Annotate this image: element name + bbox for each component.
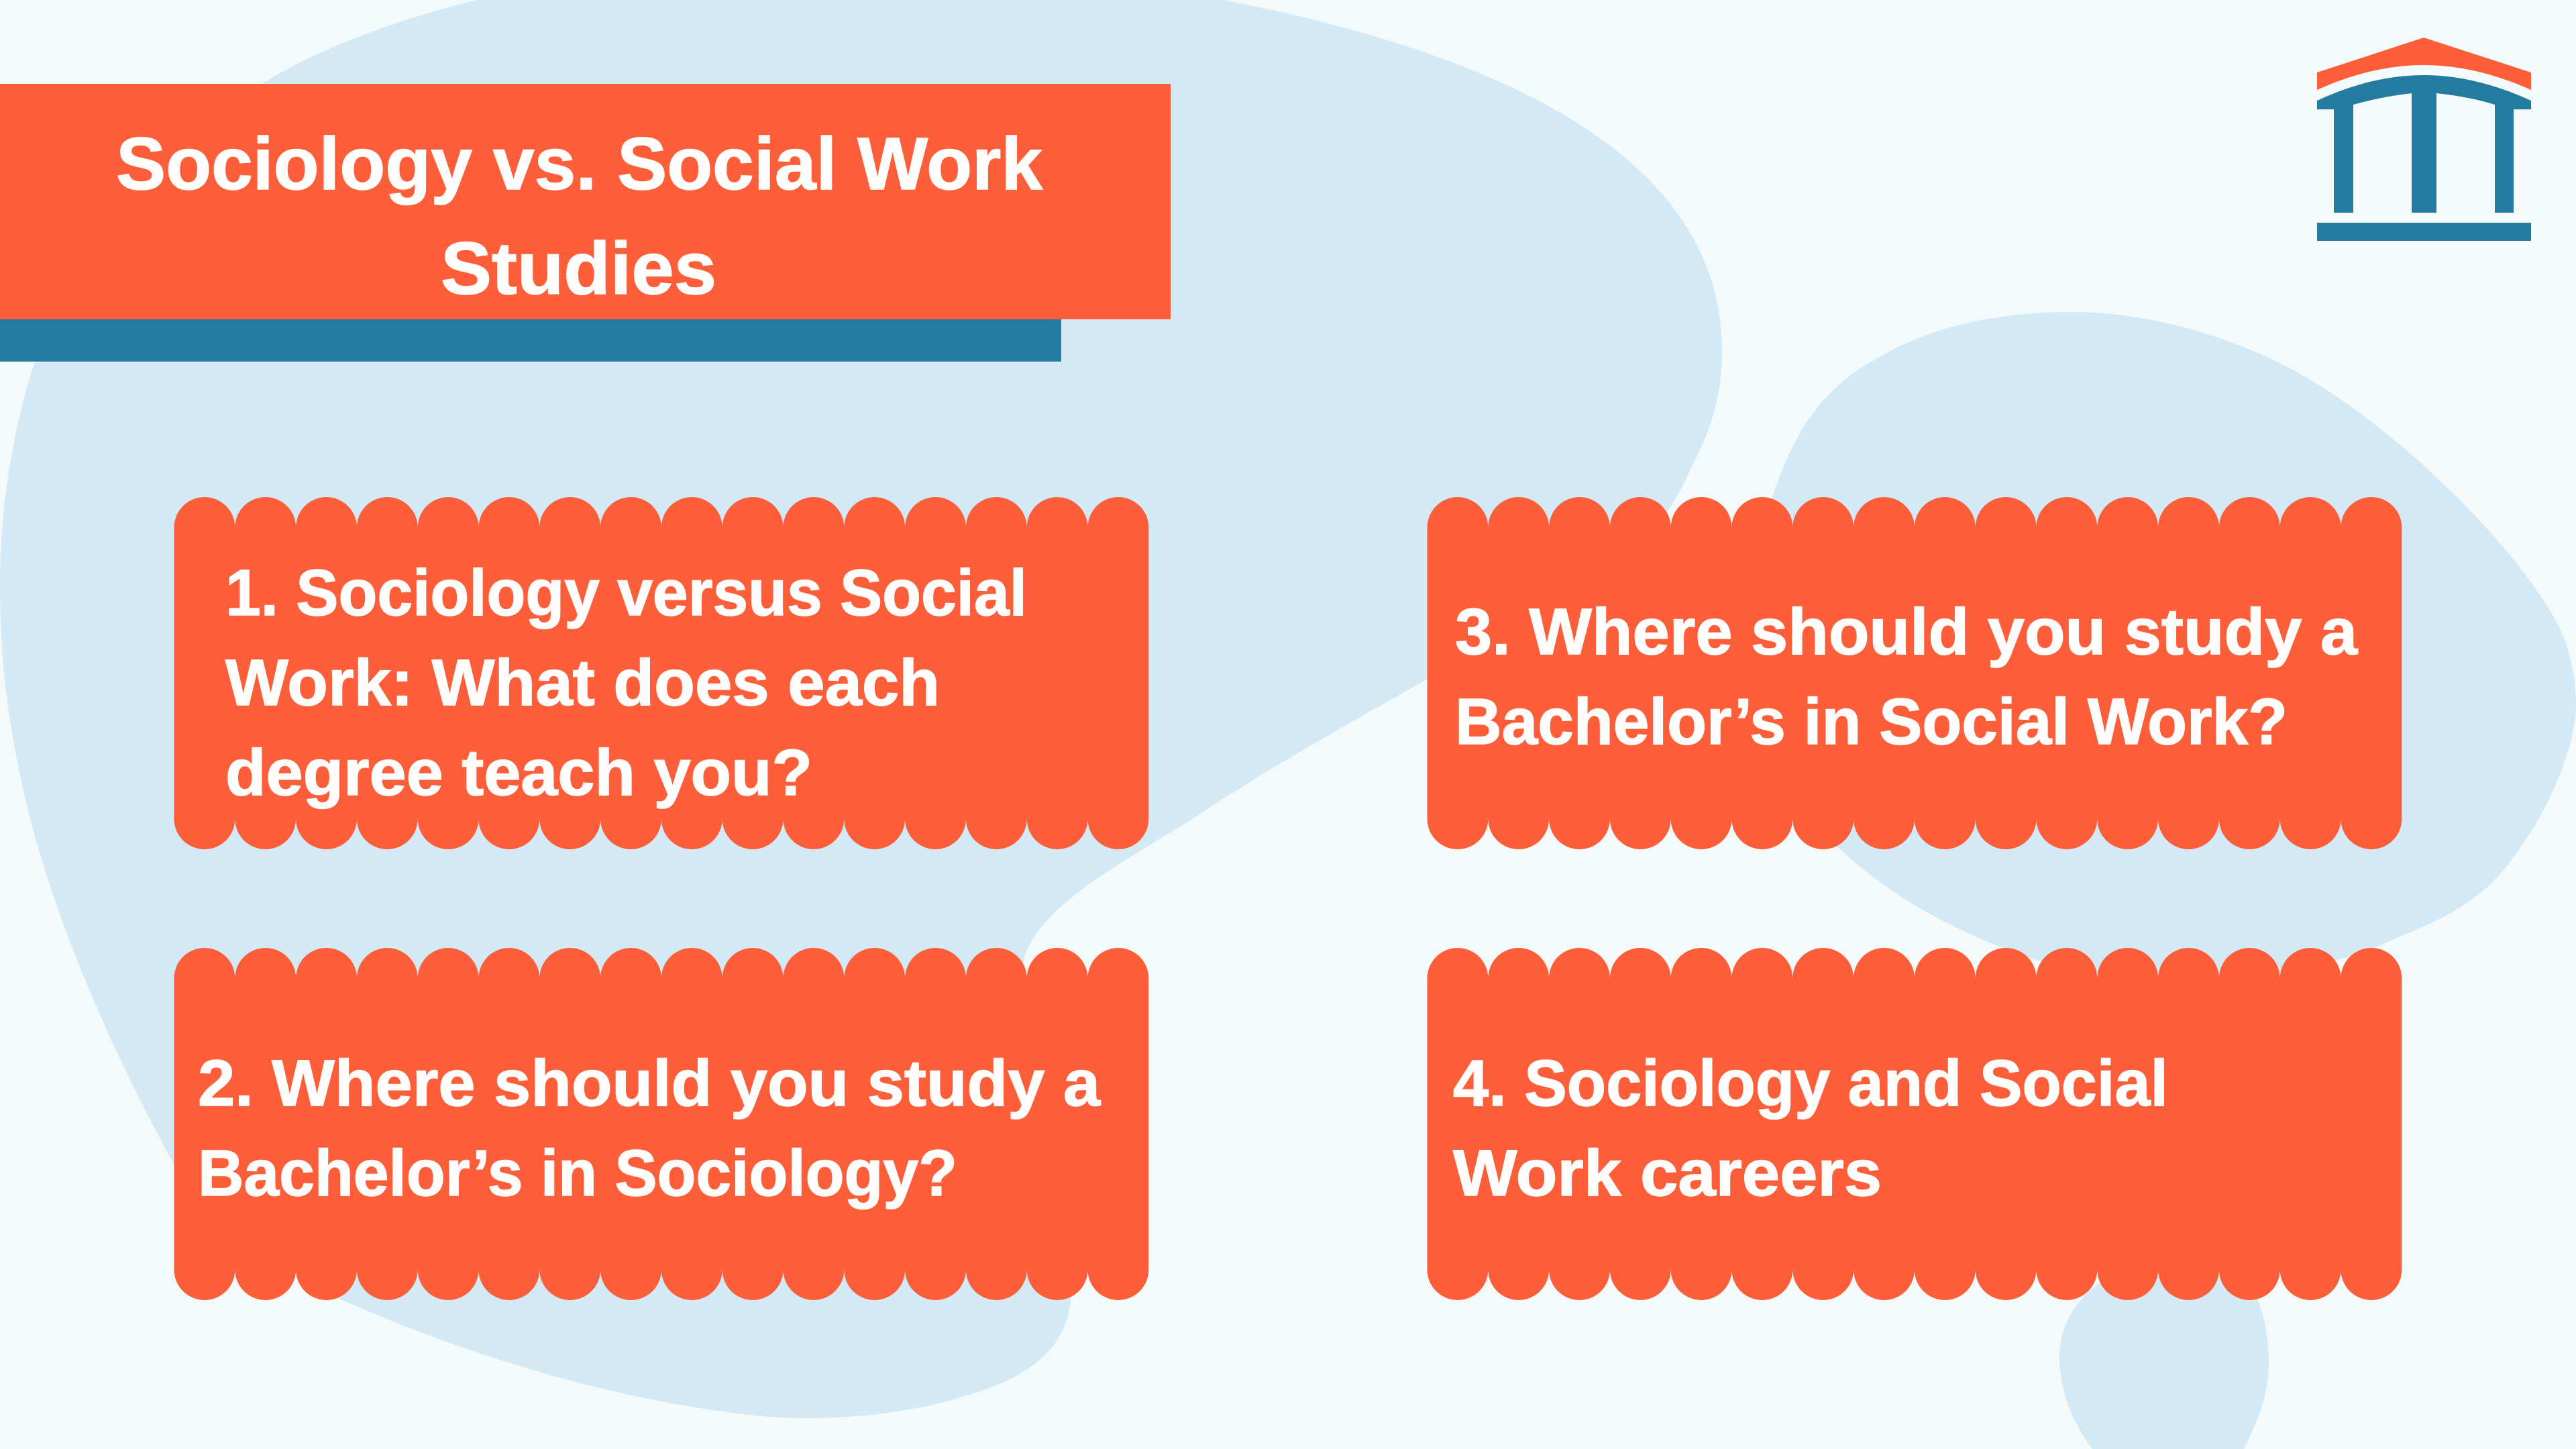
card 1 text: 1. Sociology versus Social bbox=[225, 556, 1027, 629]
title text: Studies bbox=[441, 227, 716, 310]
background blob: large left bbox=[0, 0, 1722, 1418]
card 3 text bbox=[1455, 595, 2358, 758]
card 1 text: degree teach you? bbox=[225, 736, 812, 809]
card 4 text: 4. Sociology and Social bbox=[1453, 1046, 2168, 1120]
card 3 scalloped background bbox=[1428, 497, 2402, 849]
card 1 text: Work: What does each bbox=[225, 646, 940, 719]
card 3 text: Bachelor’s in Social Work? bbox=[1455, 685, 2288, 758]
card 1 scalloped background bbox=[174, 497, 1148, 849]
card 2 text bbox=[198, 1046, 1101, 1210]
title background bbox=[0, 84, 1171, 319]
card 2 text: 2. Where should you study a bbox=[198, 1046, 1101, 1120]
title text bbox=[116, 123, 1043, 310]
card 2: where to study sociology bbox=[174, 948, 1148, 1300]
card 3 text: 3. Where should you study a bbox=[1455, 595, 2358, 668]
title text: Sociology vs. Social Work bbox=[116, 123, 1043, 205]
card 4 text bbox=[1453, 1046, 2168, 1210]
card 4: careers bbox=[1428, 948, 2402, 1300]
card 1: sociology versus social work bbox=[174, 497, 1148, 849]
icon: institution building logo bbox=[2317, 38, 2531, 241]
logo base bbox=[2317, 223, 2531, 241]
card 1 text bbox=[225, 556, 1027, 809]
title banner bbox=[0, 84, 1171, 362]
card 4 scalloped background bbox=[1428, 948, 2402, 1300]
title accent bar bbox=[0, 315, 1061, 362]
background blob: bottom right bbox=[2059, 1260, 2269, 1449]
card 2 text: Bachelor’s in Sociology? bbox=[198, 1136, 957, 1210]
logo roof bbox=[2317, 38, 2531, 90]
card 4 text: Work careers bbox=[1453, 1136, 1882, 1210]
logo arch and columns bbox=[2317, 75, 2531, 213]
card 3: where to study social work bbox=[1428, 497, 2402, 849]
card 2 scalloped background bbox=[174, 948, 1148, 1300]
background blob: right bbox=[1756, 312, 2576, 979]
